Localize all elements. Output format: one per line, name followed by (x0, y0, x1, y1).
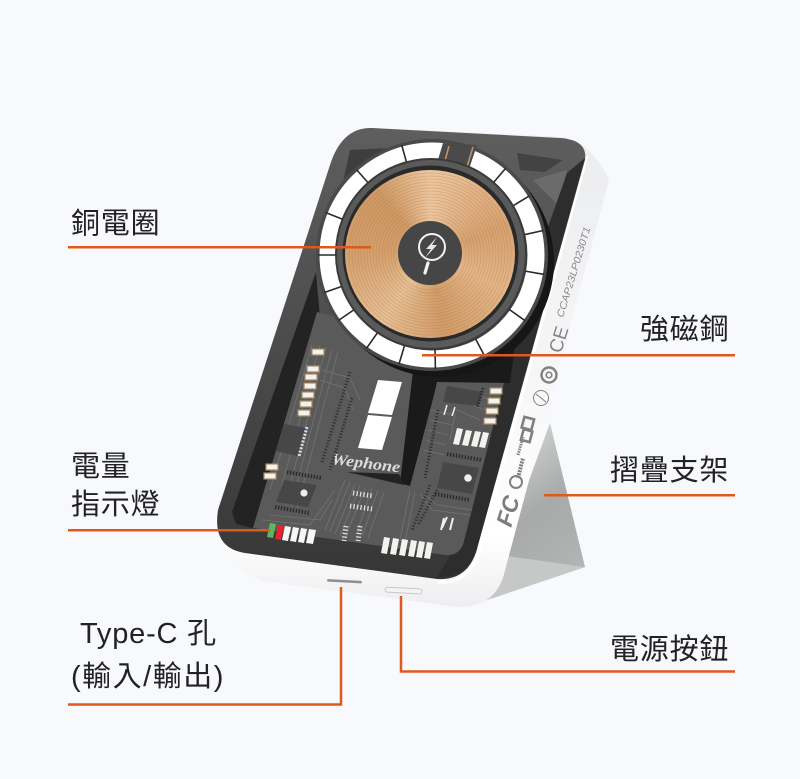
central black bay (347, 345, 515, 486)
upper translucent panels (338, 147, 567, 205)
label: magnet: 強磁鋼 (640, 314, 729, 346)
chip pins (275, 372, 483, 541)
coil windings (349, 173, 511, 335)
label: input/output: (輸入/輸出) (71, 661, 225, 693)
leader: battery lights (68, 529, 270, 531)
right capacitor row (453, 428, 489, 448)
USB-C port (327, 579, 362, 583)
front glass frame (217, 128, 585, 579)
leader: copper coil (68, 246, 371, 248)
left black wedge (232, 272, 320, 528)
capacitors (264, 349, 502, 559)
leader lines (68, 247, 735, 704)
side printed model number: CCAP23LP0230T1 (555, 226, 593, 319)
white magnet ring (328, 151, 536, 359)
CE mark: CE (546, 324, 574, 355)
label: folding stand: 摺疊支架 (610, 455, 729, 487)
kickstand (487, 423, 585, 600)
leader: power button (401, 596, 735, 672)
label: battery indicator (71, 451, 160, 521)
circuit traces (262, 345, 490, 545)
battery level indicator lights (267, 523, 316, 544)
leader: Type-C port (68, 587, 341, 704)
brand logo: Wephone (331, 451, 401, 476)
ring base shadow (324, 147, 554, 377)
left column capacitors (264, 349, 502, 479)
leader: stand (544, 494, 735, 496)
certification icons (510, 368, 556, 488)
label: battery indicator: 電量 (71, 451, 131, 483)
device body (228, 128, 609, 607)
bottom capacitor row (381, 537, 433, 559)
coil lead gap (435, 143, 477, 172)
right black band (437, 158, 585, 577)
ring segment separators (318, 145, 544, 369)
battery cells (358, 380, 402, 450)
center charging badge (398, 221, 462, 285)
circuit board (253, 312, 512, 555)
power button (385, 587, 422, 594)
label: power button: 電源按鈕 (610, 634, 729, 666)
FCC mark: FC (491, 492, 525, 529)
magnetic ring assembly (316, 139, 554, 377)
copper coil (345, 170, 515, 338)
label: battery indicator: 指示燈 (71, 489, 160, 521)
label: copper coil: 銅電圈 (71, 208, 160, 240)
leader: magnet (422, 354, 735, 356)
dark inner ring (336, 159, 526, 349)
PCB chips (275, 372, 483, 541)
label: Type-C input/output: Type-C 孔 (80, 618, 217, 650)
